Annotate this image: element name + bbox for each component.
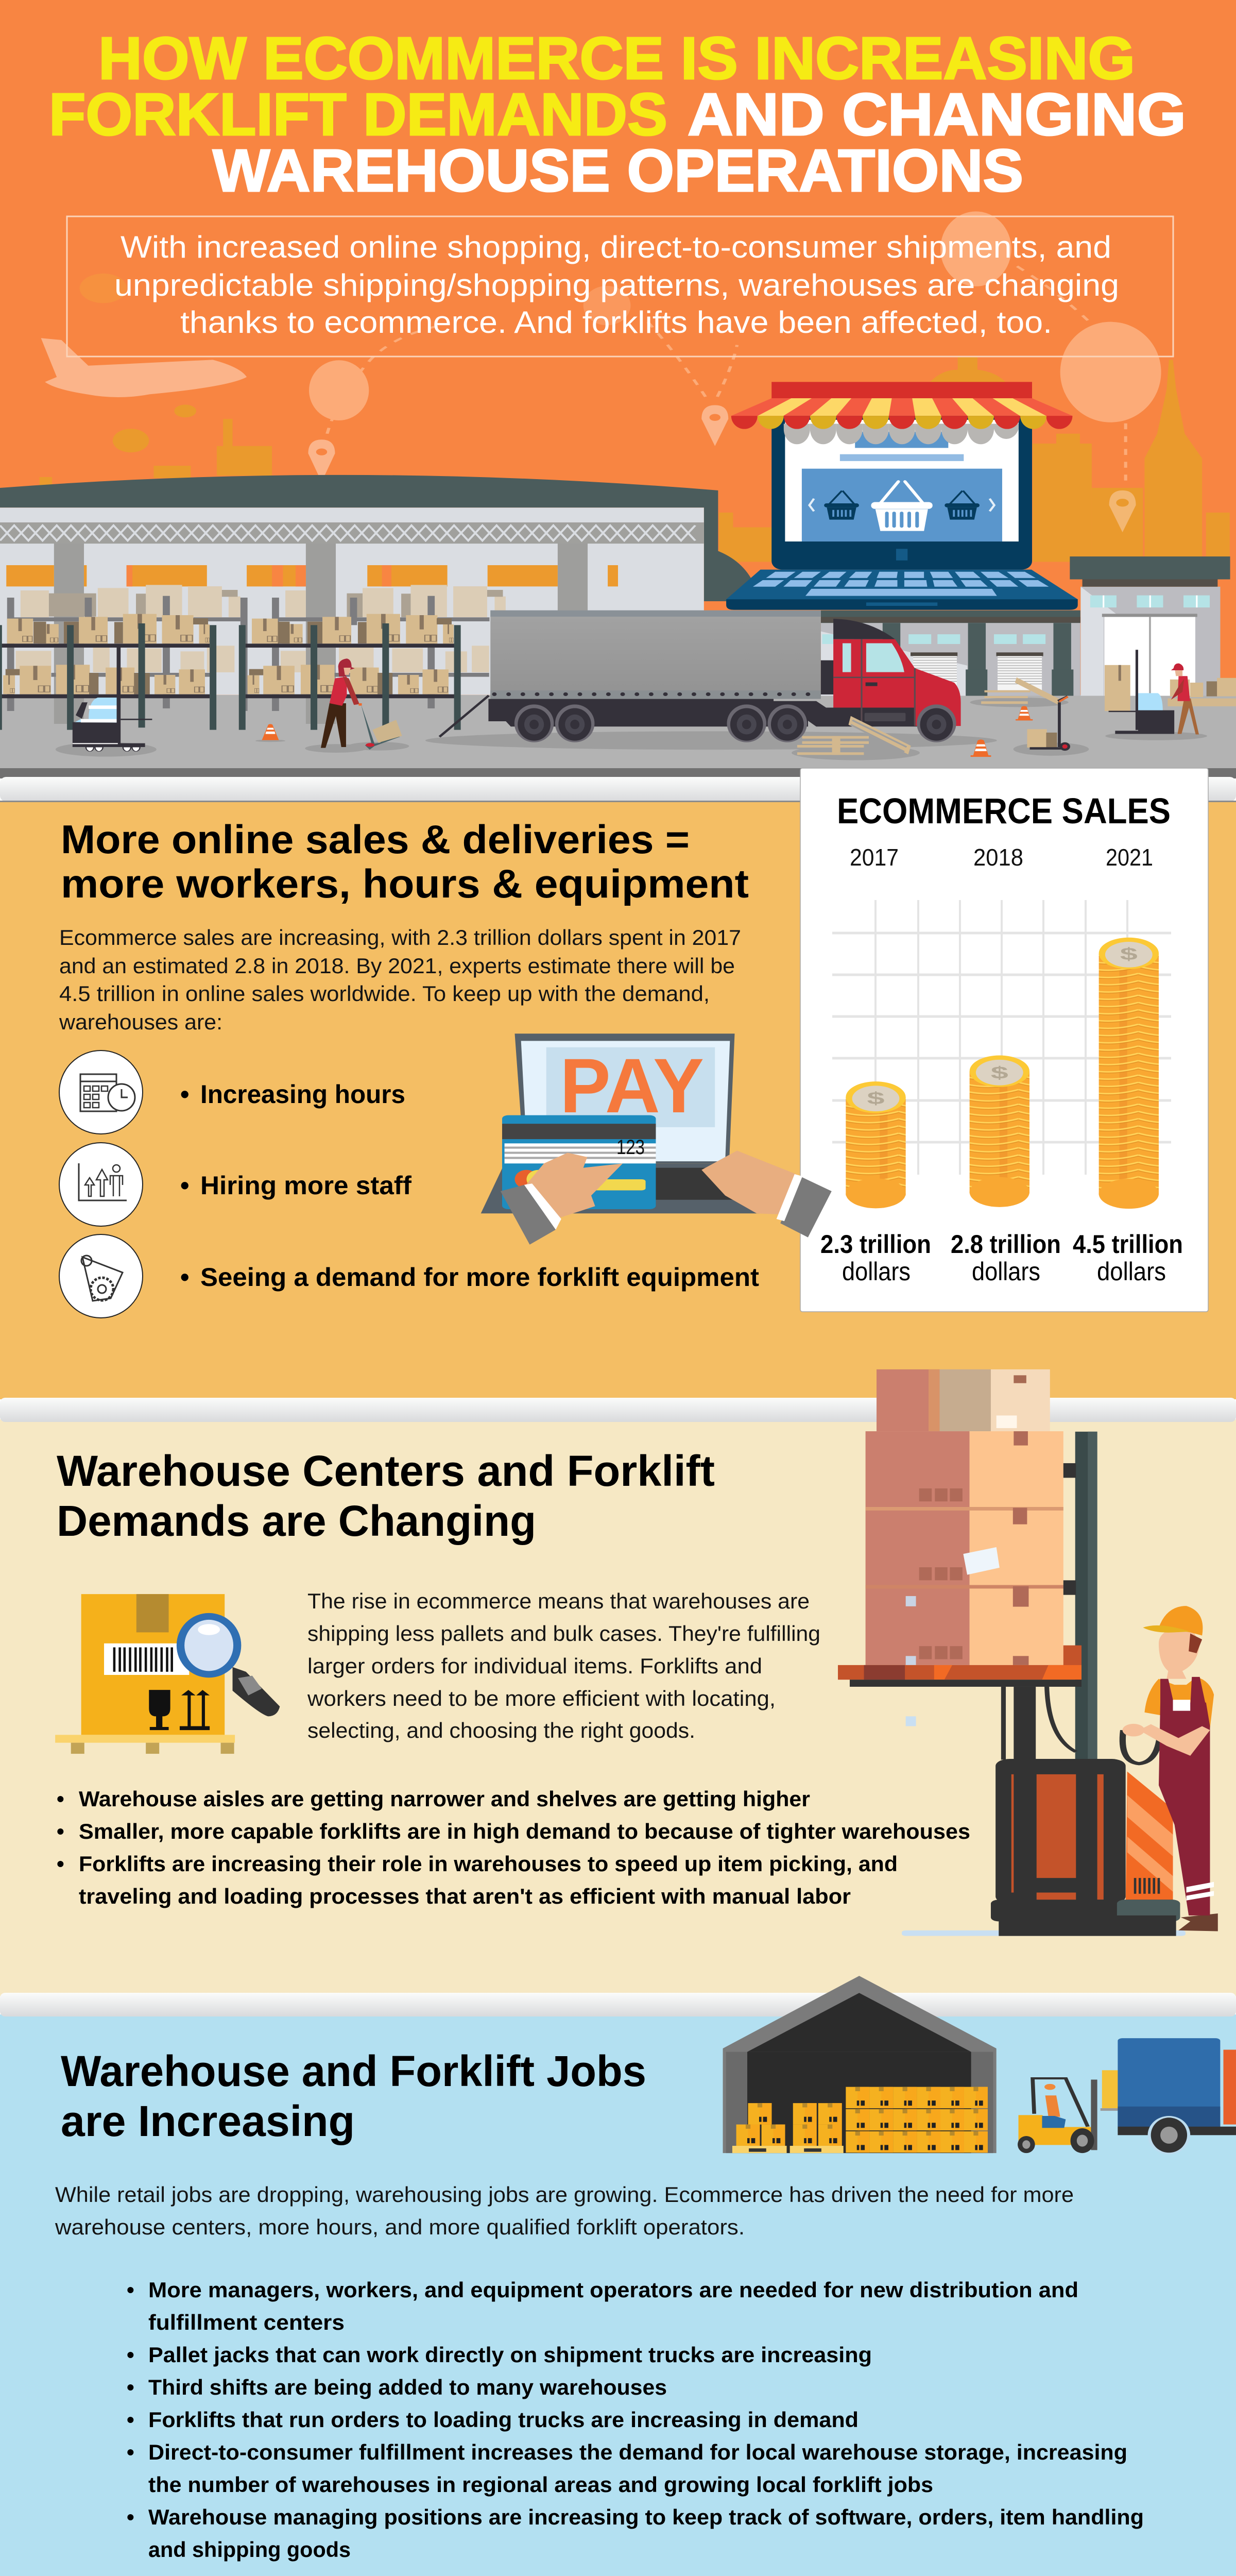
truss pattern <box>0 526 695 540</box>
section 2 bullet list <box>57 1787 970 1908</box>
stacked boxes <box>866 1369 1063 1726</box>
section 3 bullet list: • <box>127 2505 134 2529</box>
section 3 bullet list: and shipping goods <box>148 2537 351 2562</box>
section 1 body text: Ecommerce sales are increasing, with 2.3 trillion dollars spent in 2017 <box>59 925 741 950</box>
upper shelf boxes <box>7 619 33 643</box>
pallets in yard <box>792 677 1069 760</box>
section 3 body text <box>55 2182 1074 2239</box>
chart title: ECOMMERCE SALES <box>837 791 1171 831</box>
hero intro text box: thanks to ecommerce. And forklifts have been affected, too. <box>180 305 1052 340</box>
map pins <box>308 405 1136 532</box>
section 1 bullet list: • <box>180 1080 190 1109</box>
icon: sun <box>80 274 127 303</box>
hero title <box>49 25 1186 204</box>
building: dock under laptop <box>821 611 1080 696</box>
hand truck with boxes <box>1014 697 1089 756</box>
yellow forklift <box>1018 2078 1097 2153</box>
chassis <box>488 699 918 726</box>
section 2 bullet list: traveling and loading processes that aren't as efficient with manual labor <box>79 1884 851 1908</box>
section 2 body text: The rise in ecommerce means that warehouses are <box>307 1589 810 1613</box>
icon: staff growth <box>59 1143 143 1226</box>
chart value labels: dollars <box>972 1257 1040 1286</box>
forklift body <box>991 1730 1180 1936</box>
chart value labels: 2.8 trillion <box>951 1230 1061 1259</box>
section 3 bullet list: • <box>127 2408 134 2432</box>
shop laptop and loading dock <box>425 382 1236 760</box>
section 1 heading: More online sales & deliveries = <box>61 817 690 862</box>
section 3 bullet list: Forklifts that run orders to loading trucks are increasing in demand <box>148 2408 859 2432</box>
blue truck <box>1101 2038 1236 2155</box>
hero intro text box: With increased online shopping, direct-to-consumer shipments, and <box>121 230 1111 264</box>
section 3 body text: warehouse centers, more hours, and more qualified forklift operators. <box>55 2215 745 2239</box>
section 2 heading: Warehouse Centers and Forklift <box>57 1447 715 1495</box>
panel: ecommerce sales chart <box>800 768 1208 1312</box>
section 3 bullet list: Third shifts are being added to many warehouses <box>148 2375 667 2399</box>
big warehouse <box>0 475 755 695</box>
hero intro text box <box>67 216 1173 357</box>
section 2 bullet list: • <box>57 1852 64 1876</box>
traffic cones <box>971 706 1033 757</box>
traffic cone <box>255 724 285 742</box>
section 3 bullet list: • <box>127 2278 134 2302</box>
icon: calendar and clock <box>59 1050 143 1134</box>
section 2 body text: larger orders for individual items. Forklifts and <box>307 1654 762 1678</box>
section 3 bullet list: • <box>127 2375 134 2399</box>
skyline <box>40 358 1230 562</box>
delivery truck <box>425 611 997 750</box>
hero title: FORKLIFT DEMANDS <box>49 81 667 148</box>
hero title: WAREHOUSE OPERATIONS <box>213 137 1023 204</box>
truck wheels <box>514 704 554 742</box>
shop awning <box>731 382 1072 444</box>
section 3 body text: While retail jobs are dropping, warehousing jobs are growing. Ecommerce has driven the need for more <box>55 2182 1074 2207</box>
section 3 heading <box>61 2047 646 2145</box>
shelf rails and uprights <box>0 643 454 698</box>
translucent circles <box>309 211 1161 422</box>
section 3 bullet list: • <box>127 2343 134 2367</box>
worker <box>1123 1606 1218 1931</box>
illustration: order picker forklift with worker and boxes <box>838 1369 1218 1936</box>
section 1 bullet list: Increasing hours <box>200 1080 405 1109</box>
section 1 bullet list: • <box>180 1263 190 1292</box>
section 3 bullet list <box>127 2278 1144 2562</box>
chart grid <box>832 900 1171 1175</box>
section 2 bullet list: • <box>57 1787 64 1811</box>
section 2 body text: selecting, and choosing the right goods. <box>307 1718 695 1742</box>
hero intro text box: unpredictable shipping/shopping patterns, warehouses are changing <box>114 268 1119 302</box>
coin stacks <box>846 938 1159 1209</box>
order picker forklift <box>56 648 157 757</box>
warehouse with boxes <box>723 1976 997 2153</box>
truck shadow <box>425 731 997 750</box>
picker forklift and worker <box>1105 650 1236 740</box>
section 2 bullet list: • <box>57 1819 64 1843</box>
section 1 bullet list: Seeing a demand for more forklift equipment <box>200 1263 759 1292</box>
chart years <box>850 844 1153 871</box>
illustration: laptop PAY with credit card and hands: 123 <box>616 1136 645 1159</box>
lower row back boxes <box>16 646 489 672</box>
laptop keyboard <box>726 570 1078 610</box>
chart years: 2018 <box>973 844 1023 871</box>
section 1 body text: warehouses are: <box>59 1010 222 1034</box>
section 3 bullet list: • <box>127 2440 134 2464</box>
section 2 heading: Demands are Changing <box>57 1497 536 1545</box>
section 3 heading: are Increasing <box>61 2097 355 2145</box>
section 3 bullet list: Direct-to-consumer fulfillment increases the demand for local warehouse storage, increasing <box>148 2440 1127 2464</box>
hero scene background: plane, pins, skyline <box>40 211 1230 562</box>
section 1 bullet list: Hiring more staff <box>200 1171 411 1200</box>
section 3 bullet list: Warehouse managing positions are increasing to keep track of software, orders, item handling <box>148 2505 1144 2529</box>
section 2 body text <box>307 1589 820 1742</box>
chart value labels <box>820 1230 1183 1286</box>
section 3 heading: Warehouse and Forklift Jobs <box>61 2047 646 2095</box>
coin stacks: $ <box>991 1063 1008 1082</box>
illustration: warehouse interior, forklift and truck <box>723 1976 1236 2155</box>
section 3 bullet list: Pallet jacks that can work directly on shipment trucks are increasing <box>148 2343 872 2367</box>
section divider bars <box>0 777 1236 2576</box>
chart value labels: dollars <box>1097 1257 1166 1286</box>
section 2 bullet list: Forklifts are increasing their role in warehouses to speed up item picking, and <box>79 1852 898 1876</box>
section 1 body text <box>59 925 741 1034</box>
section 2 body text: shipping less pallets and bulk cases. They're fulfilling <box>307 1621 820 1646</box>
section 2 body text: workers need to be more efficient with locating, <box>307 1686 776 1710</box>
section 2 bullet list: Warehouse aisles are getting narrower and shelves are getting higher <box>79 1787 810 1811</box>
section 3 bullet list: fulfillment centers <box>148 2310 345 2334</box>
coin stacks: $ <box>1120 944 1138 963</box>
dashed routes <box>327 266 1126 481</box>
section 2 bullet list: Smaller, more capable forklifts are in high demand to because of tighter warehouses <box>79 1819 970 1843</box>
chart value labels: dollars <box>842 1257 911 1286</box>
section 1 bullet list <box>180 1080 759 1292</box>
section 2 heading <box>57 1447 715 1545</box>
worker pushing hand truck <box>305 658 409 753</box>
trailer <box>490 611 821 699</box>
section 1 bullet list: • <box>180 1171 190 1200</box>
chart value labels: 2.3 trillion <box>820 1230 931 1259</box>
section 3 bullet list: the number of warehouses in regional areas and growing local forklift jobs <box>148 2472 933 2497</box>
icon: package with barcode and magnifier <box>55 1594 280 1754</box>
section 1 heading <box>61 817 749 906</box>
section 3 bullet list: More managers, workers, and equipment operators are needed for new distribution and <box>148 2278 1078 2302</box>
PAY text: PAY <box>560 1042 704 1129</box>
warehouse interior: columns, windows, shelving <box>0 544 618 757</box>
ramp <box>439 696 489 737</box>
building: right warehouse <box>1070 556 1230 696</box>
mast and fork platform <box>838 1432 1186 1936</box>
chart value labels: 4.5 trillion <box>1073 1230 1183 1259</box>
icon: gear and belt <box>59 1234 143 1318</box>
section 1 body text: and an estimated 2.8 in 2018. By 2021, experts estimate there will be <box>59 954 735 978</box>
hero title: HOW ECOMMERCE IS INCREASING <box>98 25 1135 92</box>
chart years: 2021 <box>1106 844 1153 871</box>
laptop screen <box>771 416 1032 570</box>
section 1 body text: 4.5 trillion in online sales worldwide. To keep up with the demand, <box>59 981 710 1006</box>
illustration: laptop PAY with credit card and hands <box>481 1033 832 1245</box>
hero title: AND CHANGING <box>688 81 1186 148</box>
chart years: 2017 <box>850 844 899 871</box>
lower shelf boxes <box>20 666 51 694</box>
coin stacks: $ <box>867 1089 885 1108</box>
icon: shopping baskets <box>810 482 994 531</box>
airplane <box>41 338 247 397</box>
back shelf boxes <box>21 585 506 617</box>
section 1 heading: more workers, hours & equipment <box>61 861 749 906</box>
